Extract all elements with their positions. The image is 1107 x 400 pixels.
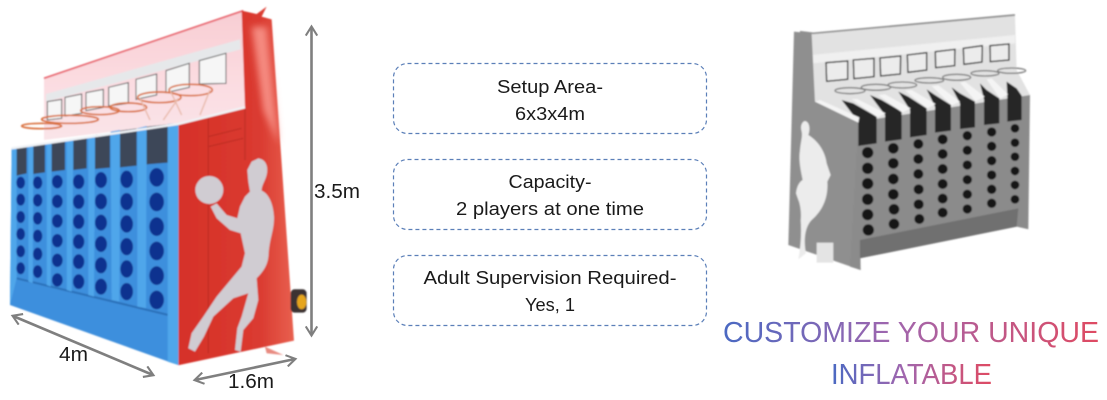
red side and tower [178,7,294,365]
top edge [800,15,1015,33]
call to action heading: CUSTOMIZE YOUR UNIQUE [723,317,1099,349]
red top edge [44,11,243,78]
info box: setup area: 6x3x4m [515,104,585,124]
info box: capacity: 2 players at one time [456,199,644,219]
info box: setup area [394,64,706,134]
depth label: 1.6m [228,371,274,393]
info box: adult supervision: Yes, 1 [525,295,575,315]
call to action heading [723,317,1099,391]
dark windows and net slopes [842,82,1022,146]
tower highlight [252,27,278,143]
basketball hoops [22,84,212,129]
white ledge above columns [12,107,245,148]
hoops [835,68,1026,94]
lighter column dividers [10,123,178,365]
dark score windows [17,124,168,176]
upper light panel [812,15,1030,122]
player silhouette [796,121,831,259]
product photo: greyscale inflatable [788,15,1030,270]
product photo: coloured inflatable [10,7,307,365]
info box: setup area: Setup Area- [497,77,603,97]
score frames [826,44,1009,81]
white band behind targets [812,35,1015,63]
call to action heading: INFLATABLE [831,359,992,391]
rating sticker [817,243,833,263]
pink upper backboard [44,11,245,140]
white target band [46,39,241,102]
blue front wall [10,123,178,365]
info box: adult supervision [394,256,706,326]
info box: adult supervision: Adult Supervision Required- [424,268,677,288]
air blower [291,289,307,313]
base band [860,208,1018,258]
depth arrow [195,359,295,380]
side panel seams [208,108,245,353]
player silhouette [188,158,274,352]
white column caps [815,78,1008,123]
info box: capacity: Capacity- [508,172,592,192]
target frames [47,53,226,120]
width label: 4m [59,344,88,366]
base shadow line [17,278,168,315]
connect-four holes [16,168,164,309]
height arrow [310,27,313,335]
ground tie [265,347,283,355]
info box: capacity [394,160,706,230]
side panel [788,32,861,270]
holes [862,124,1019,236]
front wall [850,95,1030,270]
height label: 3.5m [314,181,360,203]
width arrow [13,316,153,375]
